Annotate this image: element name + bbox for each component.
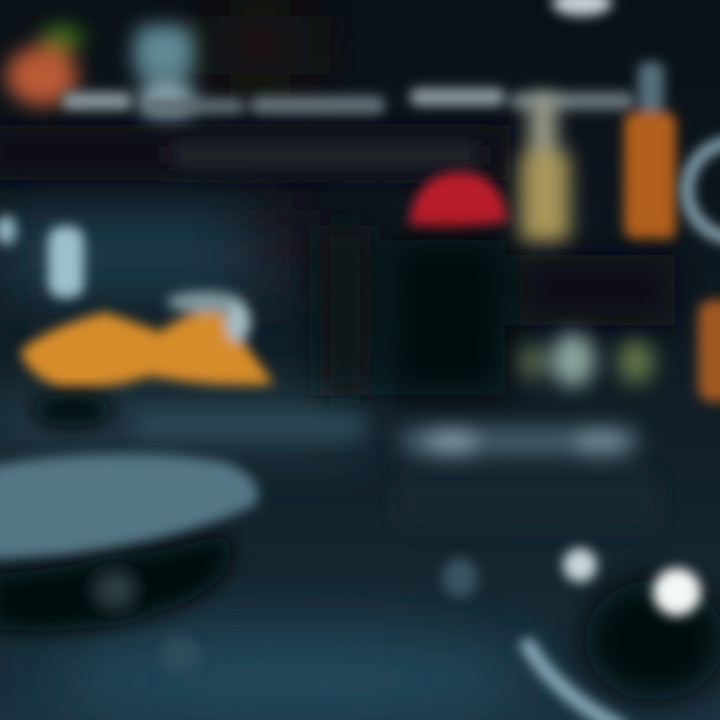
icon: yellow bottle [520,95,570,245]
icon: orange item at right edge [698,300,720,402]
icon: orange bottle [624,62,676,240]
icon: white light spots [160,0,701,673]
icon: orange food on dish [20,291,274,388]
icon: pale ring at right edge [687,142,720,238]
dark shelf band [0,125,510,180]
dark pillars center [320,225,675,395]
icon: cooking pan [395,426,660,530]
icon: jars middle right [519,333,654,387]
icon: white containers left [0,215,84,298]
dish shadow [32,394,112,426]
wall tone: left side [0,15,360,445]
icon: dark round pot lower right [585,580,720,700]
plate underside shadow [0,535,230,631]
icon: red dome lid [408,172,508,228]
icon: orange fruit [6,25,84,106]
floor [50,630,530,720]
icon: large plate [0,454,258,560]
icon: white jar [134,25,194,115]
icon: pale curved rim [525,640,625,720]
mid counter band [135,412,365,440]
blurred title band [62,88,635,114]
